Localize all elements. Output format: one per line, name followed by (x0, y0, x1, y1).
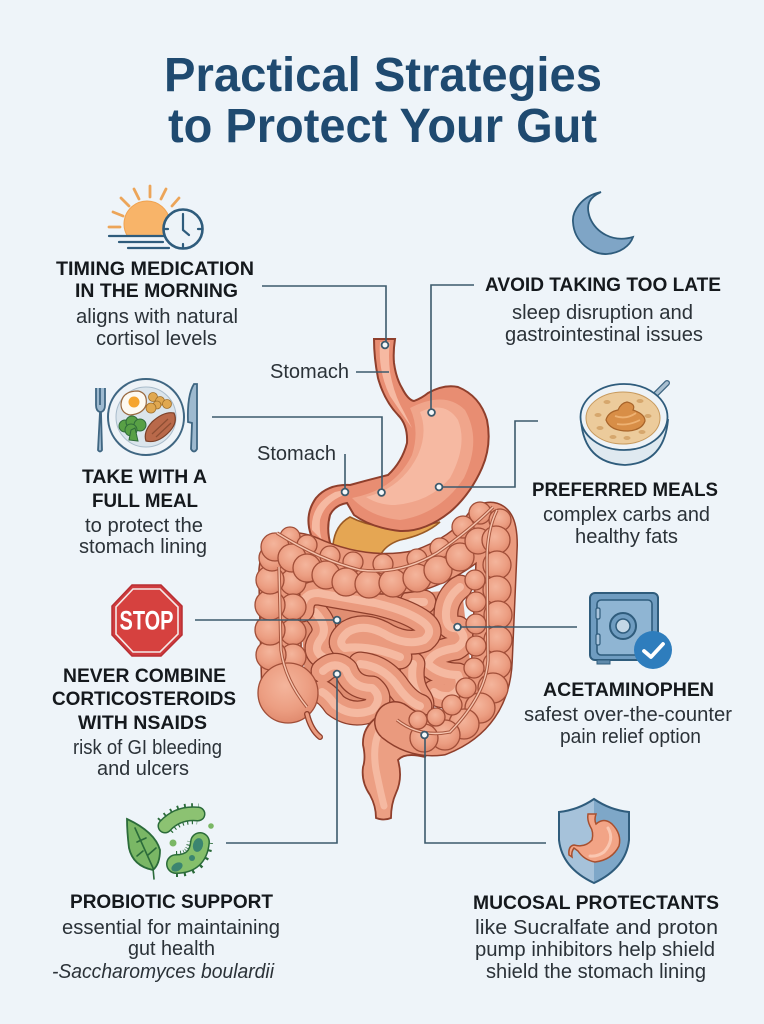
icon: leaf and probiotics (127, 814, 214, 879)
rectum (363, 714, 440, 820)
connector lines and dots (195, 285, 577, 843)
large intestine (255, 502, 512, 752)
text: never combine: WITH NSAIDS (78, 712, 207, 734)
ascending colon outer bumps (256, 640, 286, 670)
icon: stop sign: STOP (120, 606, 174, 636)
text: probiotic support: -Saccharomyces boulardii (52, 961, 275, 983)
title (164, 49, 602, 153)
icon: sunrise and clock (109, 186, 202, 248)
text: timing medication: aligns with natural (76, 306, 238, 328)
label: stomach lower: Stomach (257, 443, 336, 465)
text: never combine: CORTICOSTEROIDS (52, 688, 236, 710)
text: preferred meals: complex carbs and (543, 504, 710, 526)
anatomy illustration: digestive system (255, 339, 512, 820)
text: never combine: and ulcers (97, 758, 189, 780)
stomach and esophagus (308, 339, 489, 546)
text: preferred meals: healthy fats (575, 526, 678, 548)
text: take with a full meal: to protect the (85, 515, 203, 537)
text: probiotic support: essential for maintaining (62, 917, 280, 939)
text: acetaminophen: safest over-the-counter (524, 704, 732, 726)
caecum (258, 663, 318, 723)
icon: oatmeal bowl (580, 383, 668, 465)
pancreas (333, 517, 440, 558)
upper small bumps (280, 527, 300, 547)
text: avoid taking too late: AVOID TAKING TOO LATE (485, 274, 721, 296)
descending bumps (482, 526, 510, 554)
text: acetaminophen: ACETAMINOPHEN (543, 679, 714, 701)
title: to Protect Your Gut (168, 100, 597, 153)
small intestine (300, 587, 472, 718)
text: preferred meals: PREFERRED MEALS (532, 479, 718, 501)
text: avoid taking too late (485, 274, 721, 346)
transverse lower bumps (261, 533, 289, 561)
appendix (307, 714, 320, 737)
text: mucosal protectants: like Sucralfate and proton (475, 917, 718, 939)
icon: shield with stomach (559, 799, 629, 883)
icon: crescent moon (573, 192, 633, 254)
text: mucosal protectants (473, 892, 719, 983)
text: timing medication (56, 258, 254, 350)
taenia band lines (277, 507, 497, 734)
text: never combine: risk of GI bleeding (73, 737, 222, 759)
icon: plate with fork and knife (96, 379, 197, 455)
text: timing medication: IN THE MORNING (75, 280, 238, 302)
text: preferred meals (532, 479, 718, 548)
text: timing medication: TIMING MEDICATION (56, 258, 254, 280)
text: avoid taking too late: gastrointestinal issues (505, 324, 703, 346)
text: never combine: NEVER COMBINE (63, 665, 226, 687)
text: mucosal protectants: shield the stomach lining (486, 961, 706, 983)
icon: stop sign (112, 585, 182, 656)
text: avoid taking too late: sleep disruption and (512, 302, 693, 324)
text: probiotic support: PROBIOTIC SUPPORT (70, 891, 273, 913)
text: timing medication: cortisol levels (96, 328, 217, 350)
text: acetaminophen: pain relief option (560, 726, 701, 748)
text: take with a full meal (79, 466, 207, 558)
text: take with a full meal: stomach lining (79, 536, 207, 558)
label: stomach upper: Stomach (270, 361, 349, 383)
text: mucosal protectants: pump inhibitors help shield (475, 939, 715, 961)
title: Practical Strategies (164, 49, 602, 102)
icon: safe with check badge (590, 593, 672, 669)
text: probiotic support: gut health (128, 938, 215, 960)
ascending colon inner bumps (280, 569, 306, 595)
text: mucosal protectants: MUCOSAL PROTECTANTS (473, 892, 719, 914)
text: take with a full meal: FULL MEAL (92, 490, 198, 512)
text: acetaminophen (524, 679, 732, 748)
text: never combine (52, 665, 236, 780)
text: take with a full meal: TAKE WITH A (82, 466, 207, 488)
text: probiotic support (52, 891, 280, 983)
